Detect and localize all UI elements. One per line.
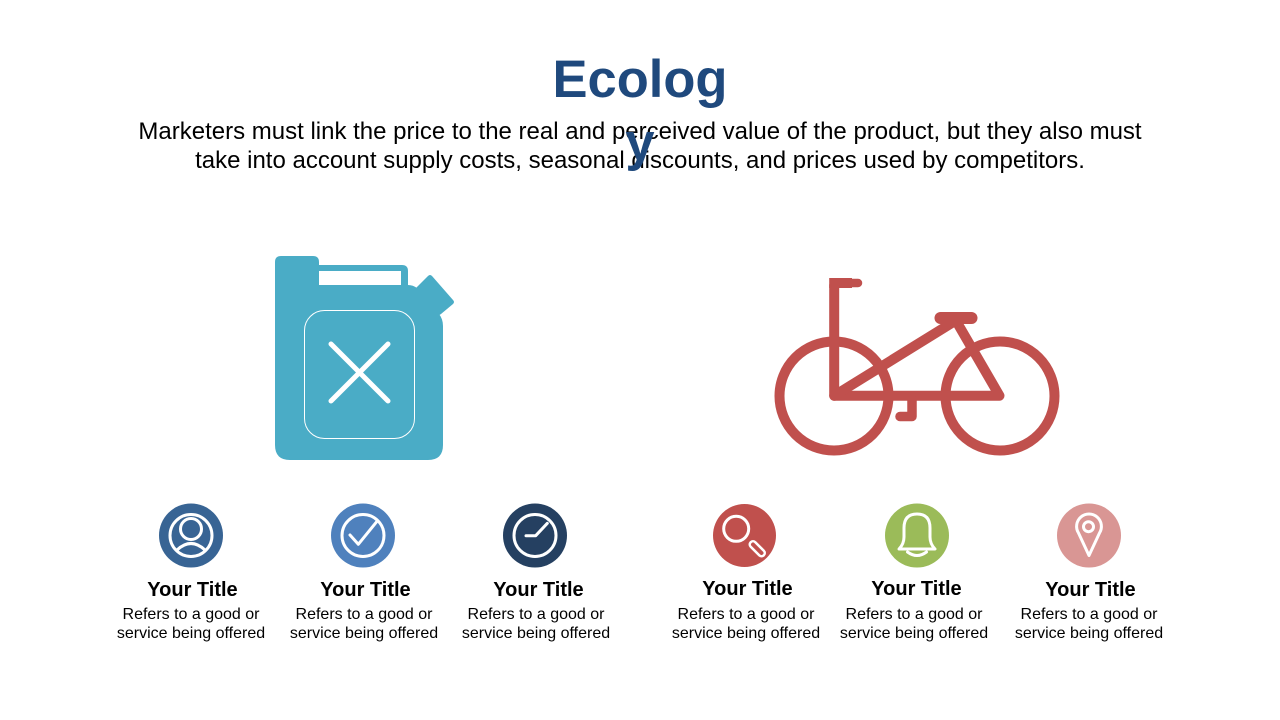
- icon: magnifier: [713, 504, 776, 567]
- item description: [117, 606, 265, 642]
- item description: service being offered: [290, 625, 438, 642]
- item: check: [290, 504, 438, 642]
- item heading: Your Title: [702, 578, 793, 600]
- subtitle text block: [138, 118, 1142, 174]
- subtitle text block: Marketers must link the price to the real and perceived value of the product, but they also must: [138, 118, 1142, 145]
- icon: bell: [885, 504, 949, 568]
- item description: Refers to a good or: [846, 606, 983, 623]
- icon: check: [331, 504, 395, 568]
- item description: service being offered: [672, 625, 820, 642]
- title: y: [625, 113, 655, 172]
- item heading: Your Title: [320, 579, 411, 601]
- item: location: [1015, 504, 1163, 642]
- item description: service being offered: [840, 625, 988, 642]
- item description: Refers to a good or: [123, 606, 260, 623]
- item description: [840, 606, 988, 642]
- item description: [462, 606, 610, 642]
- item description: Refers to a good or: [1021, 606, 1158, 623]
- item heading: Your Title: [147, 579, 238, 601]
- icon: user: [159, 504, 223, 568]
- item description: [290, 606, 438, 642]
- icon: clock: [503, 504, 567, 568]
- item description: service being offered: [462, 625, 610, 642]
- subtitle text block: take into account supply costs, seasonal discounts, and prices used by competitors.: [195, 147, 1085, 174]
- icon: bicycle: [780, 278, 1054, 450]
- item description: service being offered: [1015, 625, 1163, 642]
- title: Ecolog: [552, 50, 728, 109]
- item: search: [672, 504, 820, 642]
- item: bell: [840, 504, 988, 642]
- item description: Refers to a good or: [296, 606, 433, 623]
- item description: Refers to a good or: [678, 606, 815, 623]
- item description: [672, 606, 820, 642]
- icon: jerrycan: [275, 256, 454, 460]
- item: clock: [462, 504, 610, 642]
- item heading: Your Title: [1045, 579, 1136, 601]
- item heading: Your Title: [871, 578, 962, 600]
- title: [552, 50, 728, 172]
- item description: service being offered: [117, 625, 265, 642]
- item: user: [117, 504, 265, 642]
- item description: Refers to a good or: [468, 606, 605, 623]
- item description: [1015, 606, 1163, 642]
- icon: map pin: [1057, 504, 1121, 568]
- item heading: Your Title: [493, 579, 584, 601]
